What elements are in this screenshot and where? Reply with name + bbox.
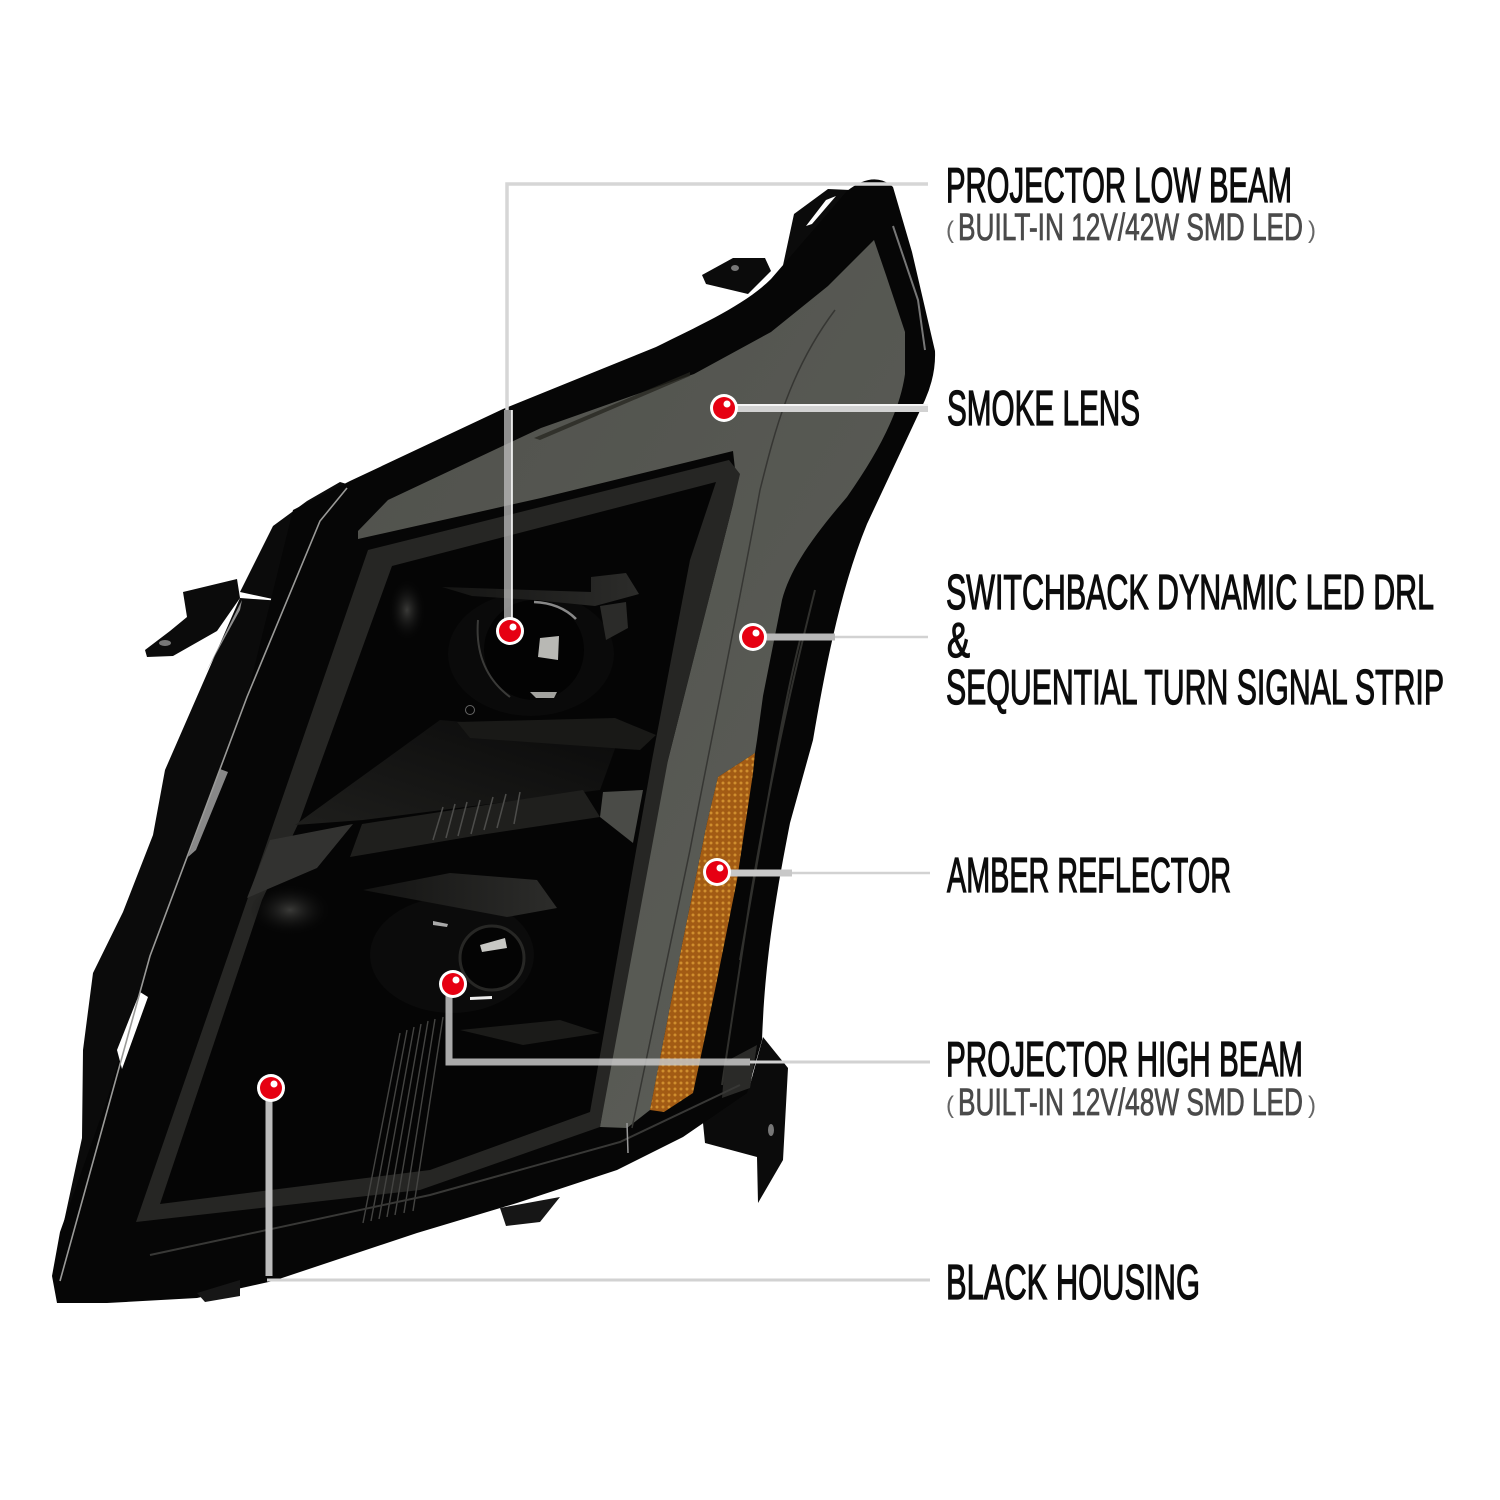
leader line: projector high beam <box>449 995 930 1062</box>
bottom seam <box>150 1085 740 1255</box>
main lens body <box>52 179 935 1303</box>
leader line: amber reflector <box>728 872 930 874</box>
inner housing black <box>160 482 716 1204</box>
label: switchback DRL and turn signal: & <box>947 614 970 668</box>
inner frame <box>136 460 740 1222</box>
label: projector low beam: ) <box>1308 217 1316 244</box>
leader line: smoke lens <box>735 405 928 408</box>
label: projector low beam: BUILT-IN 12V/42W SMD LED <box>958 207 1303 249</box>
bracket slit <box>806 196 836 226</box>
label: projector high beam: ) <box>1308 1092 1316 1119</box>
vent ribs <box>433 792 520 840</box>
label: projector high beam: BUILT-IN 12V/48W SMD LED <box>958 1082 1303 1124</box>
middle crossbar <box>247 790 643 898</box>
lens dark streak <box>534 372 690 440</box>
leader line: black housing <box>267 1100 930 1280</box>
label: amber reflector: AMBER REFLECTOR <box>947 849 1231 903</box>
label: projector low beam <box>946 159 1316 249</box>
marker: projector high beam <box>439 970 467 998</box>
label: projector high beam <box>946 1033 1316 1124</box>
label: black housing: BLACK HOUSING <box>946 1256 1200 1310</box>
bottom lugs <box>197 1197 560 1302</box>
reflection slit <box>893 226 925 350</box>
bracket holes <box>159 265 774 1136</box>
rear housing and brackets <box>60 189 850 1240</box>
strip base highlight <box>627 1123 628 1153</box>
marker: projector low beam <box>496 617 524 645</box>
label: projector high beam: ( <box>946 1092 954 1119</box>
upper projector <box>442 573 656 750</box>
marker: LED DRL <box>739 623 767 651</box>
label: smoke lens: SMOKE LENS <box>947 382 1140 436</box>
strip divider <box>632 310 835 1128</box>
marker: black housing <box>257 1074 285 1102</box>
leader line: projector low beam <box>507 184 928 630</box>
amber reflector <box>650 753 755 1112</box>
marker: amber reflector <box>703 858 731 886</box>
diagonal upper bezel <box>295 720 620 825</box>
body highlight line <box>60 488 347 1281</box>
headlight assembly <box>52 179 935 1303</box>
label: switchback DRL and turn signal <box>946 566 1444 715</box>
smoke lens panel <box>358 240 905 1128</box>
lower ribs <box>363 1017 443 1223</box>
right rim lines <box>722 590 815 1085</box>
window gaps in rear housing <box>117 600 242 1069</box>
lower right fill <box>722 1045 757 1098</box>
label: projector low beam: ( <box>946 217 954 244</box>
leader line: LED DRL <box>765 636 928 638</box>
marker: smoke lens <box>710 394 738 422</box>
lower projector <box>363 873 600 1045</box>
glow areas <box>250 580 425 935</box>
